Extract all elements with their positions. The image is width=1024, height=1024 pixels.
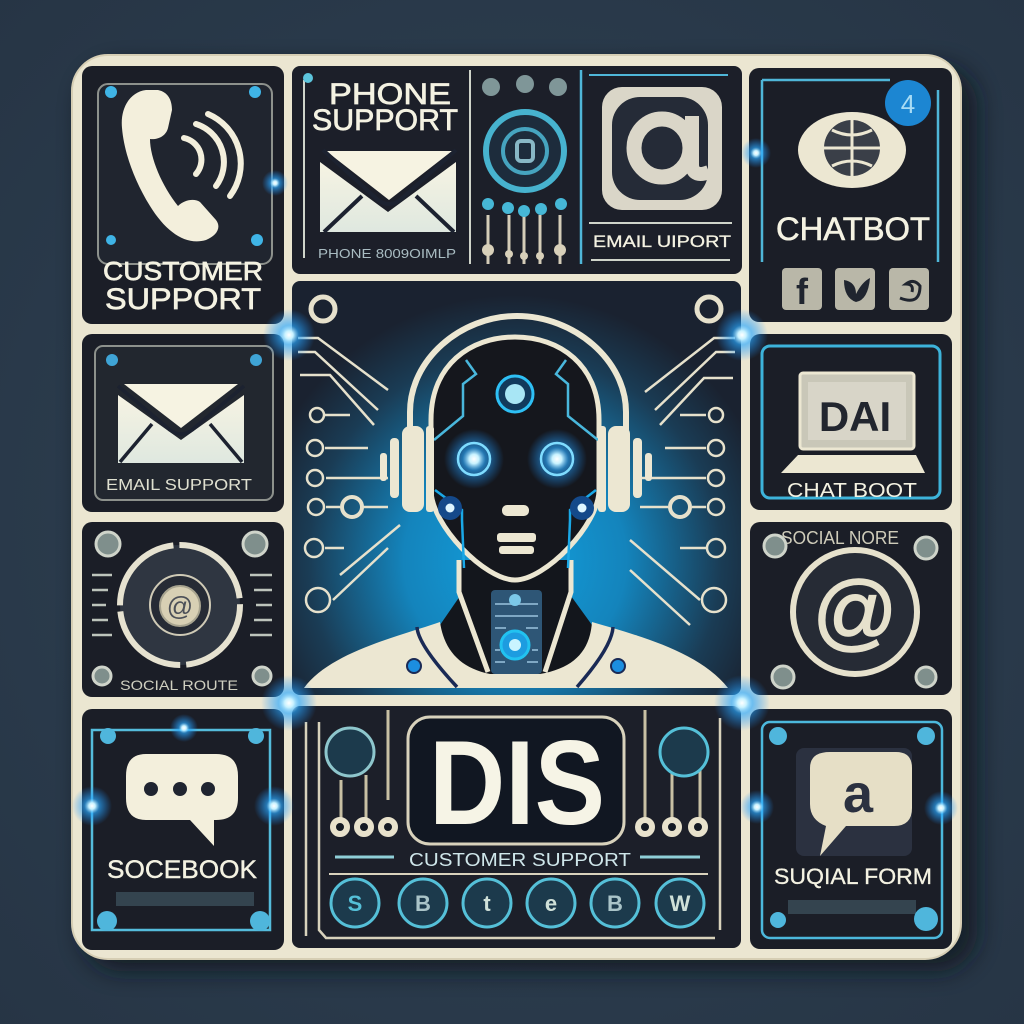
robot neck [440,560,592,688]
glowing junction lights [72,138,958,826]
icon: at sign ring: @ [812,564,898,658]
dial [120,545,240,665]
glowing eyes [497,376,533,412]
circuit lines right [630,297,735,625]
panel: socebook [82,709,284,950]
icon: speech bubble with at: a [843,764,874,824]
panel: social nore at sign [750,522,952,695]
badge: 4 [901,89,915,119]
dial: @ [167,591,193,621]
label: SOCEBOOK [107,856,257,884]
badge [885,80,931,126]
panel: social form [750,709,952,949]
icon: laptop [781,373,925,473]
panel: chat boot [750,334,952,510]
caption: customer support: CUSTOMER SUPPORT [409,850,631,870]
label: CHAT BOOT [787,480,917,502]
robot shoulders [304,622,728,688]
icon: speech bubble [126,754,238,846]
panel: DIS customer support [292,706,741,948]
panel: DIS customer support: S [348,891,362,916]
panel: social route left [82,522,284,697]
connector nodes [341,710,700,818]
label: email support: EMAIL UIPORT [593,232,731,251]
row of round icons [331,879,704,927]
panel: customer support [82,66,284,324]
icon: telephone handset [122,90,241,241]
panel: DIS customer support: t [483,891,491,916]
label: CUSTOMER [103,256,263,286]
icon: speech bubble with at [810,752,912,856]
icon: central dial [486,112,564,190]
panel: DIS customer support: B [415,891,431,916]
icon: globe [798,112,906,188]
panel: DIS customer support: e [545,891,557,916]
small caption: PHONE 8009OIMLP [318,246,456,261]
board frame [72,55,961,959]
panel: chatbot [749,68,952,322]
heading line 2: SUPPORT [312,104,458,137]
icon: laptop: DAI [819,393,891,440]
headband [410,316,626,430]
icon: at sign ring [793,550,917,674]
label: chatbot: CHATBOT [776,211,930,247]
panel: email support left [82,334,284,512]
icon: at sign tile [602,87,722,210]
board shadow [82,66,977,971]
social icons: f [796,271,809,312]
small icons [482,75,567,96]
robot head [431,337,599,580]
heading: phone support: PHONE [329,78,451,111]
headphones [380,426,652,512]
panel: DIS customer support: B [607,891,623,916]
small caption [116,892,254,906]
panel: phone support and email [292,66,742,274]
label: SUQIAL FORM [774,864,932,889]
social icons [782,268,929,312]
panel: central robot [292,281,741,695]
circuit lines left [298,297,400,612]
DIS box: DIS [429,716,605,850]
mouth [502,505,529,516]
label: SOCIAL ROUTE [120,677,238,693]
panel: DIS customer support: W [670,891,691,916]
label: SOCIAL NORE [781,528,899,548]
corner nodes [93,532,271,685]
icon: envelope [320,150,456,232]
label: EMAIL SUPPORT [106,477,252,494]
label: SUPPORT [105,283,261,316]
icon: envelope [118,384,244,463]
sliders [488,215,560,264]
